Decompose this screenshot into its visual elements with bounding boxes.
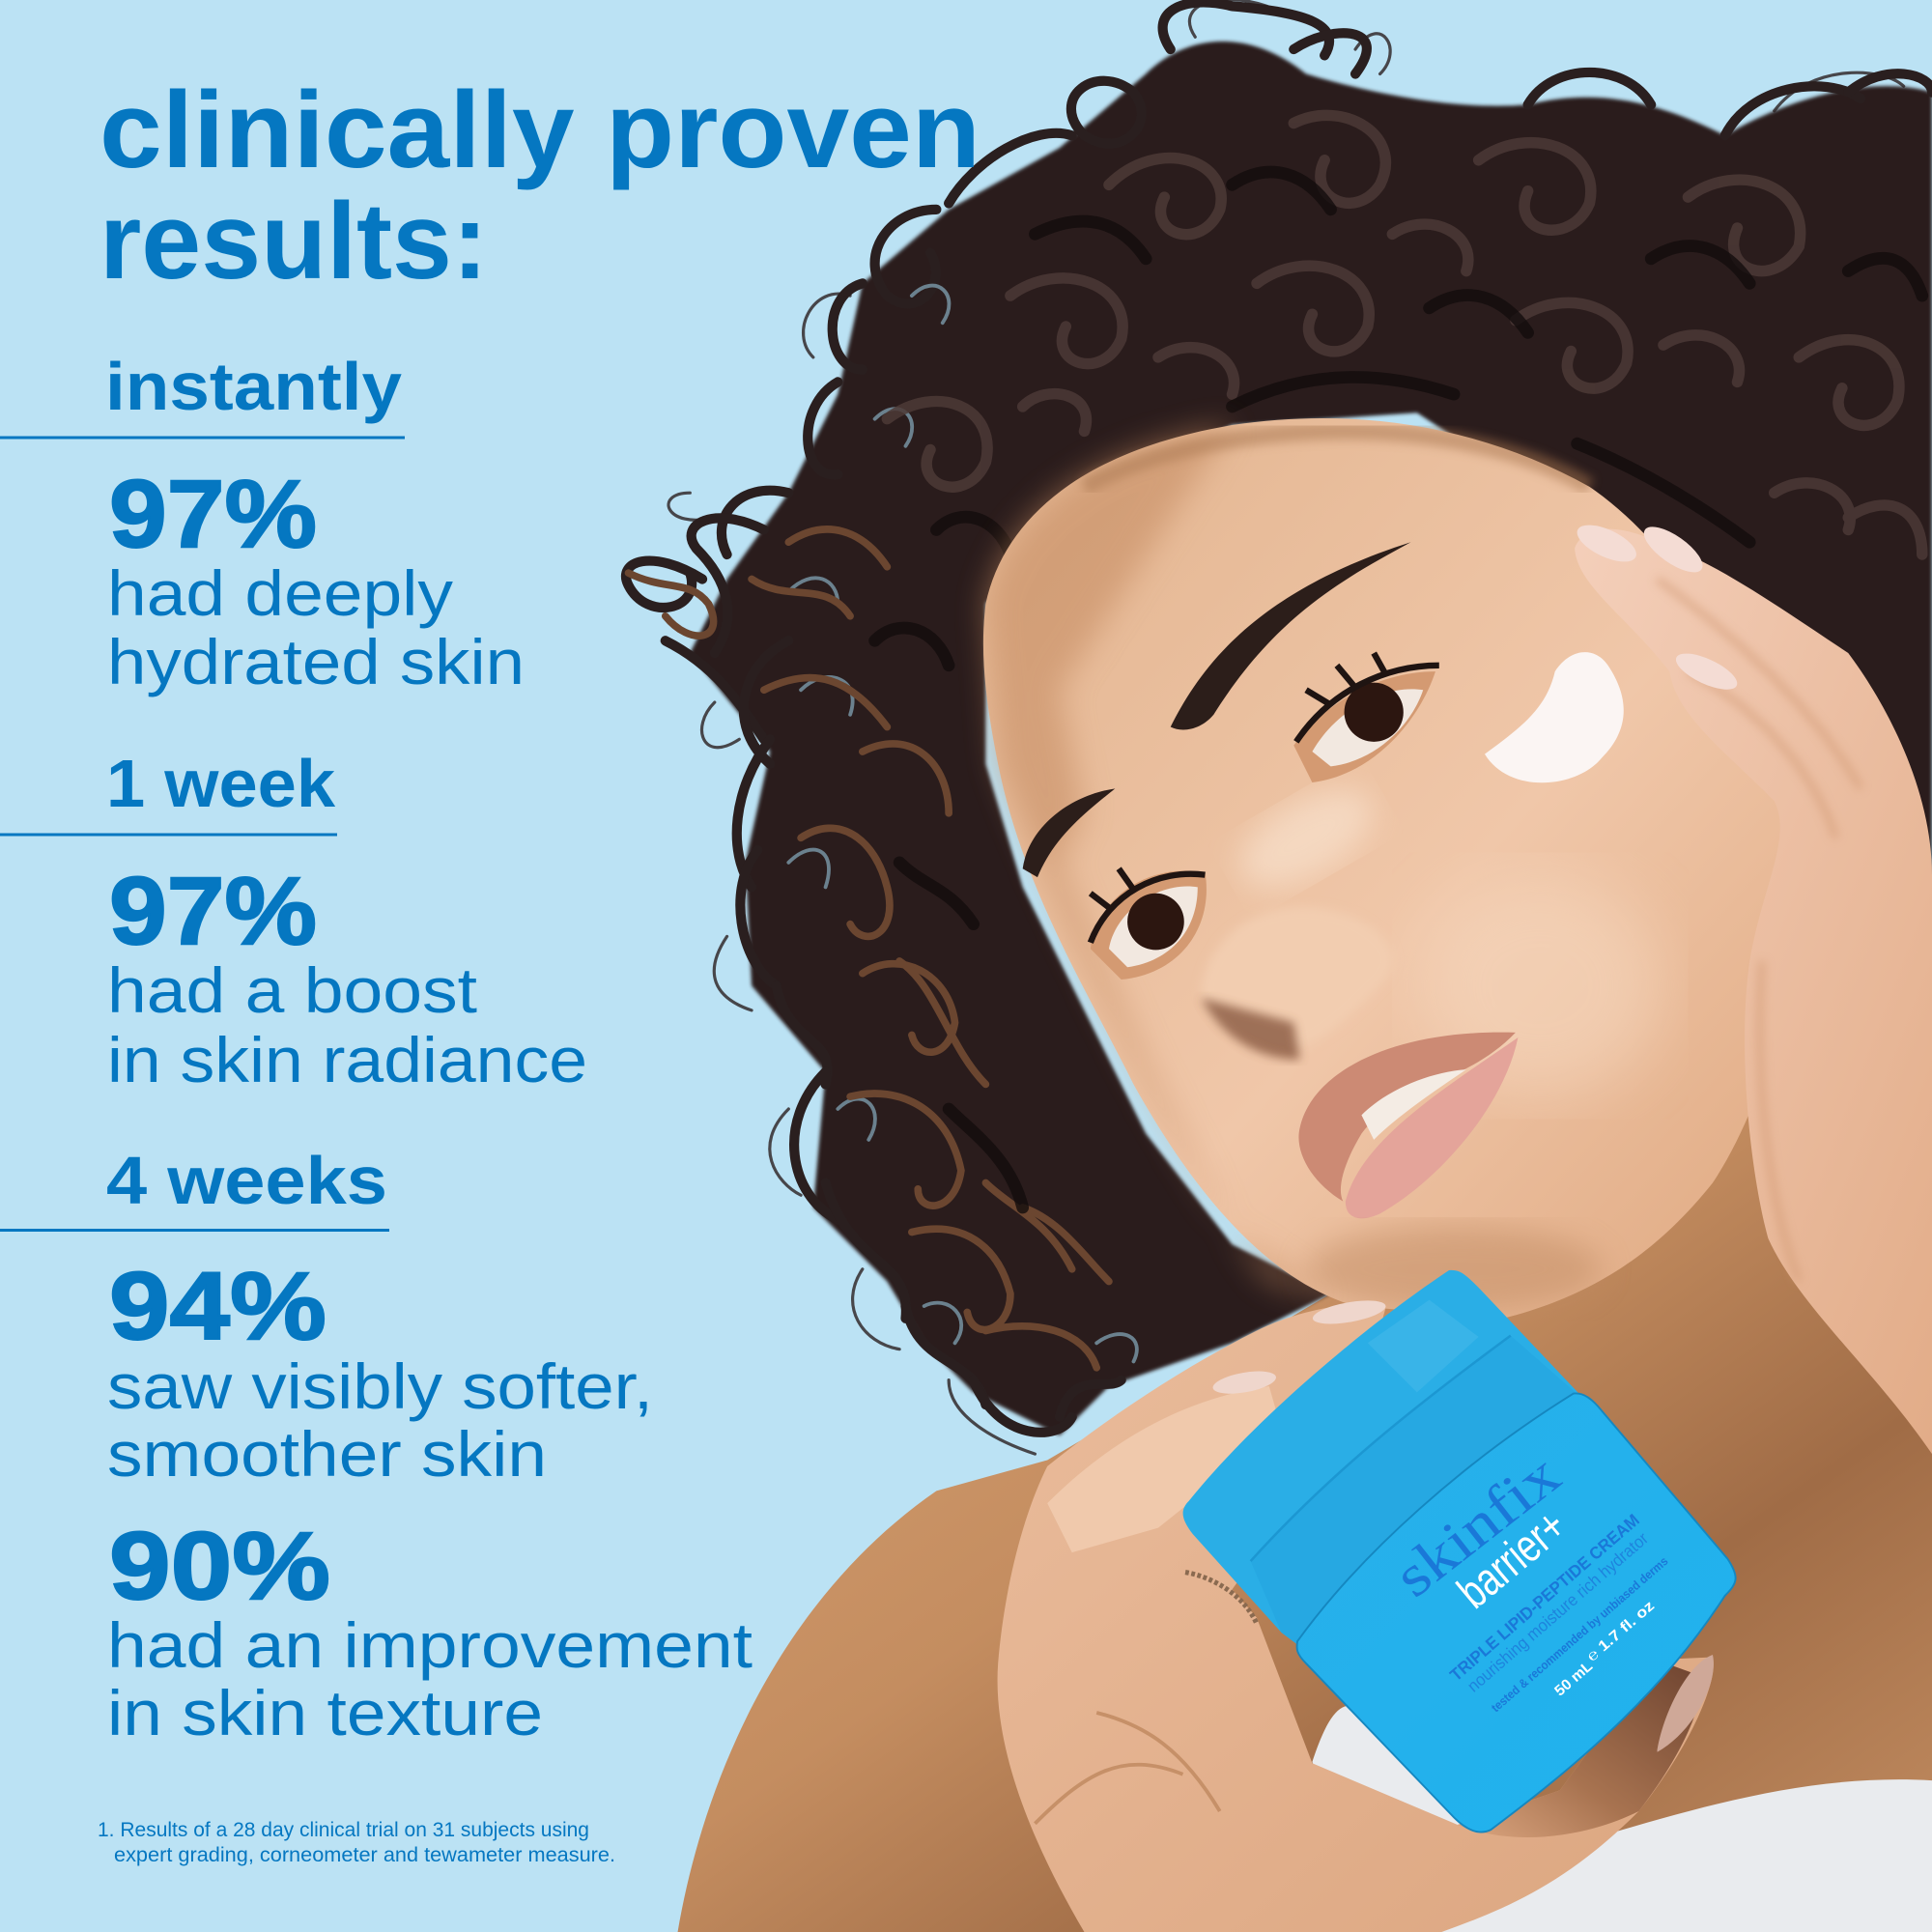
hair outer curls xyxy=(626,2,1932,1433)
jar body xyxy=(1297,1393,1736,1833)
jar: skinfix barrier+ xyxy=(1183,1270,1736,1833)
jar label text: TRIPLE LIPID-PEPTIDE CREAM xyxy=(1446,1510,1643,1685)
flyaway hair xyxy=(668,0,1904,1454)
stat: 97% skin radiance xyxy=(107,857,587,1095)
jar label text xyxy=(1382,1441,1670,1715)
footnote xyxy=(98,1819,615,1866)
title: results: xyxy=(99,181,488,301)
stat: 90% skin texture xyxy=(107,1512,753,1748)
lid sheen xyxy=(1368,1300,1479,1392)
section: 1 week xyxy=(0,746,587,1095)
upper eyebrow xyxy=(1171,542,1410,730)
hair curl texture xyxy=(887,115,1922,554)
heading: 4 weeks: 4 weeks xyxy=(106,1143,387,1218)
lower eyebrow xyxy=(1023,788,1115,877)
cheek sheen xyxy=(1417,875,1663,1096)
thumb nail xyxy=(1658,1655,1714,1752)
section: instantly xyxy=(0,349,525,697)
stat: 90% skin texture: had an improvement xyxy=(107,1609,753,1681)
white top xyxy=(1312,1706,1932,1932)
lid lower band xyxy=(1251,1336,1589,1651)
jar label text: tested & recommended by unbiased derms xyxy=(1489,1553,1670,1715)
footnote: 1. Results of a 28 day clinical trial on 31 subjects using xyxy=(98,1819,589,1841)
photo: woman with curly hair applying cream xyxy=(626,0,1932,1932)
title xyxy=(99,70,980,301)
stat: 94% softer skin: saw visibly softer, xyxy=(107,1350,653,1422)
finger nails xyxy=(1572,518,1742,696)
lid band line xyxy=(1251,1336,1511,1561)
chin shadow xyxy=(1306,1226,1602,1312)
fingers xyxy=(1047,1386,1282,1552)
finger nails xyxy=(1211,1296,1387,1398)
cream swipe xyxy=(1485,652,1624,782)
face shading xyxy=(985,425,1331,1300)
neck, chest and shoulder xyxy=(678,1047,1932,1932)
nose xyxy=(1202,907,1393,1060)
stat: 90% skin texture: in skin texture xyxy=(107,1677,543,1748)
stat: 97% skin radiance: in skin radiance xyxy=(107,1024,587,1095)
hairline shadow xyxy=(1084,431,1589,487)
stat: 97% skin radiance: had a boost xyxy=(107,954,477,1026)
hair bright gaps xyxy=(788,286,1137,1361)
jar lid xyxy=(1183,1270,1589,1651)
lips xyxy=(1298,1033,1518,1218)
stat: 97% deeply hydrated: had deeply xyxy=(107,557,453,629)
ring xyxy=(1185,1573,1257,1624)
stat: 97% skin radiance: 97% xyxy=(109,857,317,964)
title: clinically proven xyxy=(99,70,980,190)
stat: 97% deeply hydrated: hydrated skin xyxy=(107,626,525,697)
footnote: expert grading, corneometer and tewameter measure. xyxy=(114,1844,615,1866)
thumb shadow xyxy=(1458,1660,1701,1837)
upper eye xyxy=(1293,653,1439,782)
hair brown highlights xyxy=(629,529,1109,1368)
stat: 94% softer skin: 94% xyxy=(109,1252,327,1359)
left hand holding jar xyxy=(998,1296,1714,1932)
section: 4 weeks xyxy=(0,1143,753,1748)
stat: 94% softer skin xyxy=(107,1252,653,1490)
stat: 97% deeply hydrated xyxy=(107,460,525,697)
palm lines xyxy=(1035,1713,1220,1824)
jar label text: nourishing moisture rich hydrator xyxy=(1463,1528,1652,1696)
jar label text: ℮ 1.7 fl. oz xyxy=(1583,1598,1658,1665)
jar label text: 50 mL xyxy=(1551,1658,1596,1699)
stat: 97% deeply hydrated: 97% xyxy=(109,460,317,567)
stat: 90% skin texture: 90% xyxy=(109,1512,330,1619)
heading: 1 week: 1 week xyxy=(106,746,335,821)
hair deep shadows xyxy=(875,172,1922,1208)
skin highlight xyxy=(1224,769,1388,907)
jar label text: barrier+ xyxy=(1448,1499,1577,1619)
face xyxy=(983,418,1797,1319)
heading: instantly: instantly xyxy=(105,349,402,424)
right hand on cheek xyxy=(1572,518,1932,1454)
curly hair xyxy=(626,0,1932,1454)
jar label text: skinfix xyxy=(1382,1441,1573,1610)
stat: 94% softer skin: smoother skin xyxy=(107,1418,547,1490)
lower eye xyxy=(1091,868,1207,980)
hand contour lines xyxy=(1658,579,1861,1282)
